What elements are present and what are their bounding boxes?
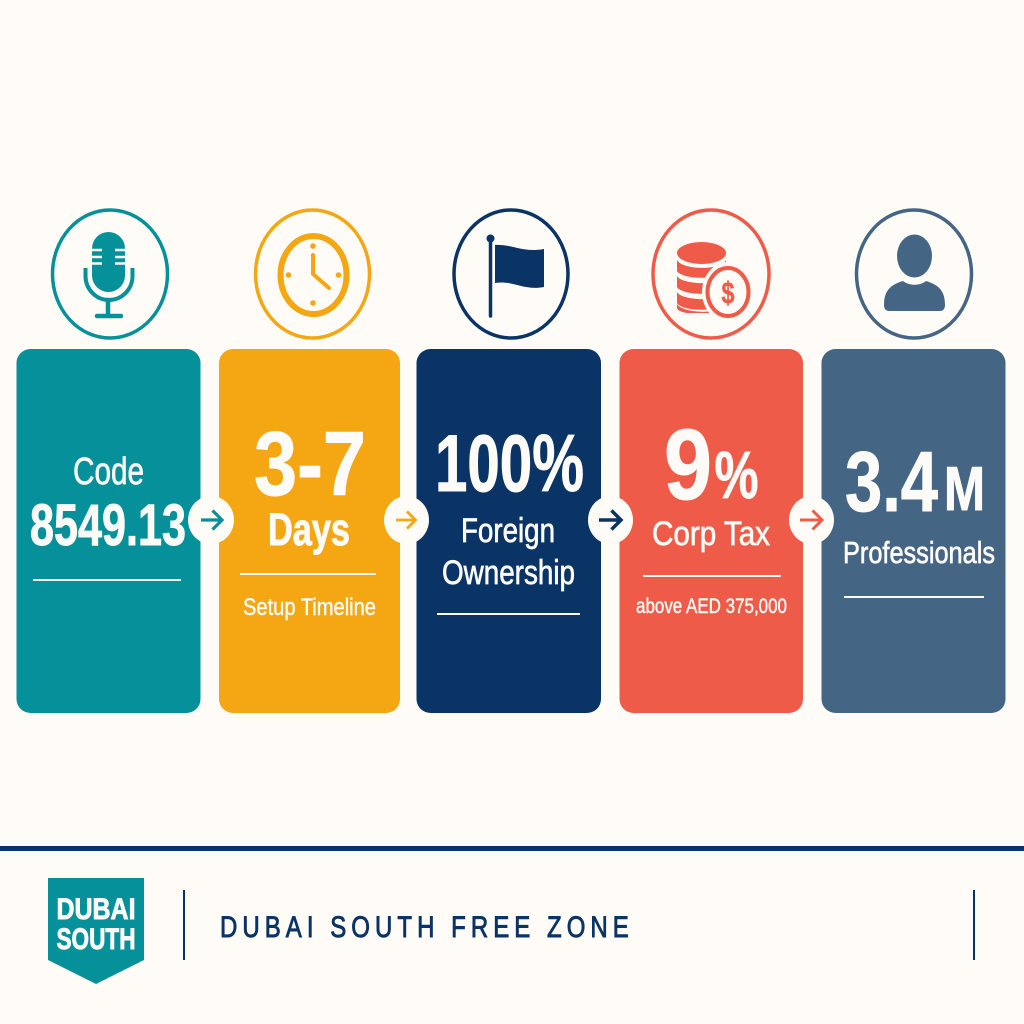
arrow: teal [188,496,234,544]
arrow: amber [384,496,429,544]
text: days: Days [268,504,350,555]
text: corp tax: Corp Tax [652,515,770,553]
panel: code [16,349,200,713]
text: percent: 100% [435,419,584,509]
text: value: 3.4 [845,435,938,530]
logo badge [48,878,144,984]
text: percent sign: % [714,438,758,513]
text: setup timeline: Setup Timeline [243,594,376,621]
arrow: navy [588,496,633,544]
text: professionals: Professionals [843,535,995,570]
arrow: coral [789,496,834,544]
logo badge: DUBAI [56,893,136,926]
text: million suffix: M [944,455,985,524]
text: ownership: Ownership [442,554,575,592]
icon: clock [256,210,370,338]
logo badge: SOUTH [56,923,136,956]
icon: flag [454,210,568,338]
text: threshold: above AED 375,000 [636,595,787,618]
icon: person [856,210,972,338]
footer title: DUBAI SOUTH FREE ZONE [220,909,629,944]
icon: coins with dollar: $ [722,275,734,310]
icon: coins with dollar [653,210,769,338]
text: nine: 9 [664,409,712,521]
panel: foreign ownership [416,349,601,713]
panel: professionals [822,349,1006,713]
panel: setup days [219,349,400,713]
panel: corporate tax [620,349,803,713]
icon: microphone [52,210,168,338]
footer [0,846,1024,984]
text: foreign: Foreign [461,512,555,550]
text: days range: 3-7 [254,414,366,515]
text: code label: Code [73,451,144,493]
text: code number: 8549.13 [30,493,186,558]
